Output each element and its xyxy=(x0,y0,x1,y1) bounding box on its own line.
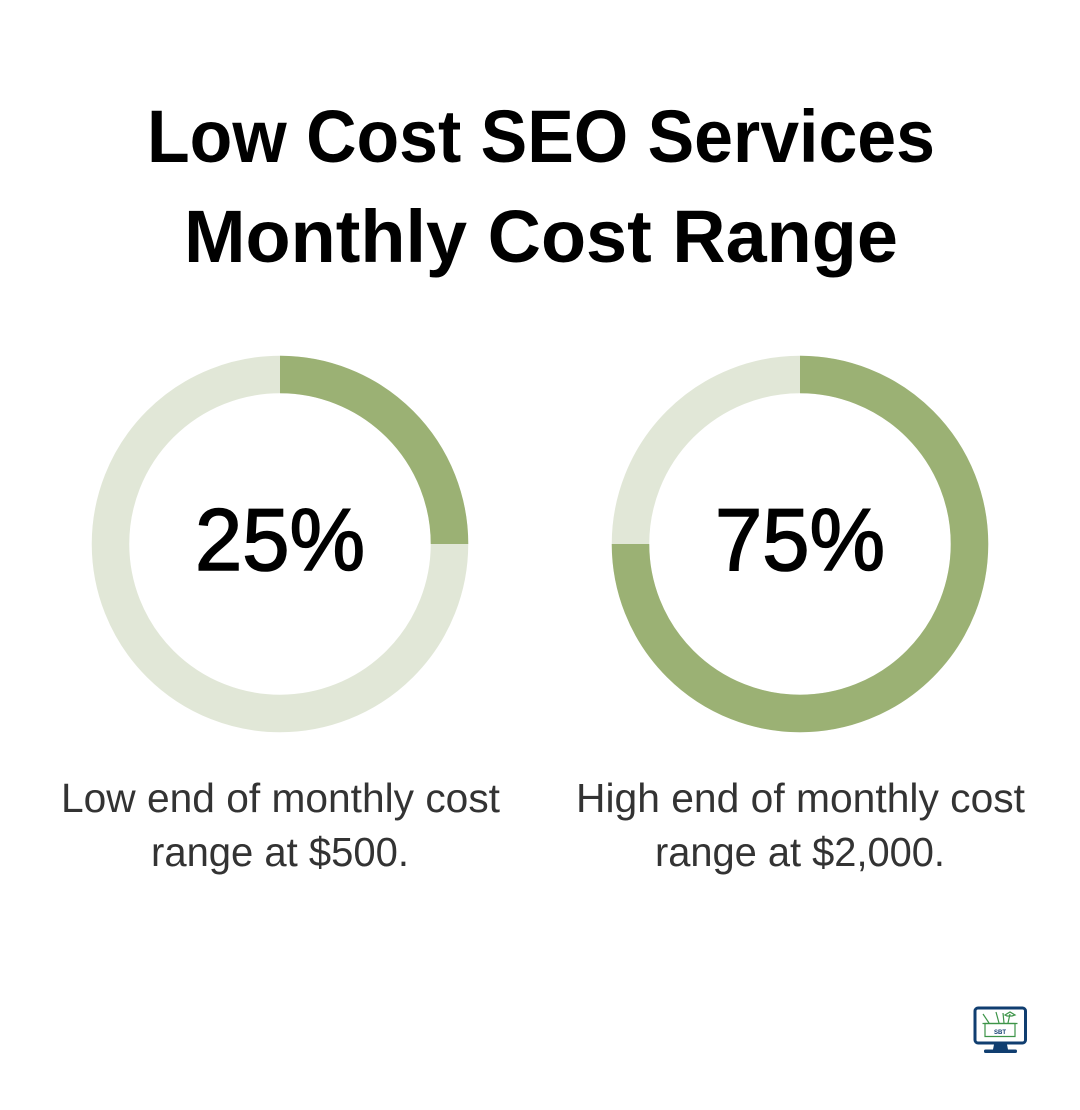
panel: high end 75% xyxy=(576,374,1026,875)
caption: high end: High end of monthly cost xyxy=(576,775,1026,821)
caption: low end: range at $500. xyxy=(151,829,409,875)
caption: low end: Low end of monthly cost xyxy=(61,775,501,821)
caption: high end xyxy=(576,775,1026,875)
value: 75%: 75% xyxy=(715,490,885,589)
icon: SBT monitor logo xyxy=(975,1008,1026,1053)
donut chart: 25% xyxy=(110,374,450,714)
title: Monthly Cost Range xyxy=(184,195,898,278)
donut chart: 75% xyxy=(630,374,970,714)
caption: low end xyxy=(61,775,501,875)
value: 25%: 25% xyxy=(195,490,365,589)
title: Low Cost SEO Services xyxy=(147,95,935,178)
caption: high end: range at $2,000. xyxy=(655,829,945,875)
panel: low end 25% xyxy=(61,374,501,875)
icon: SBT monitor logo: SBT xyxy=(994,1030,1006,1036)
title xyxy=(147,95,935,278)
